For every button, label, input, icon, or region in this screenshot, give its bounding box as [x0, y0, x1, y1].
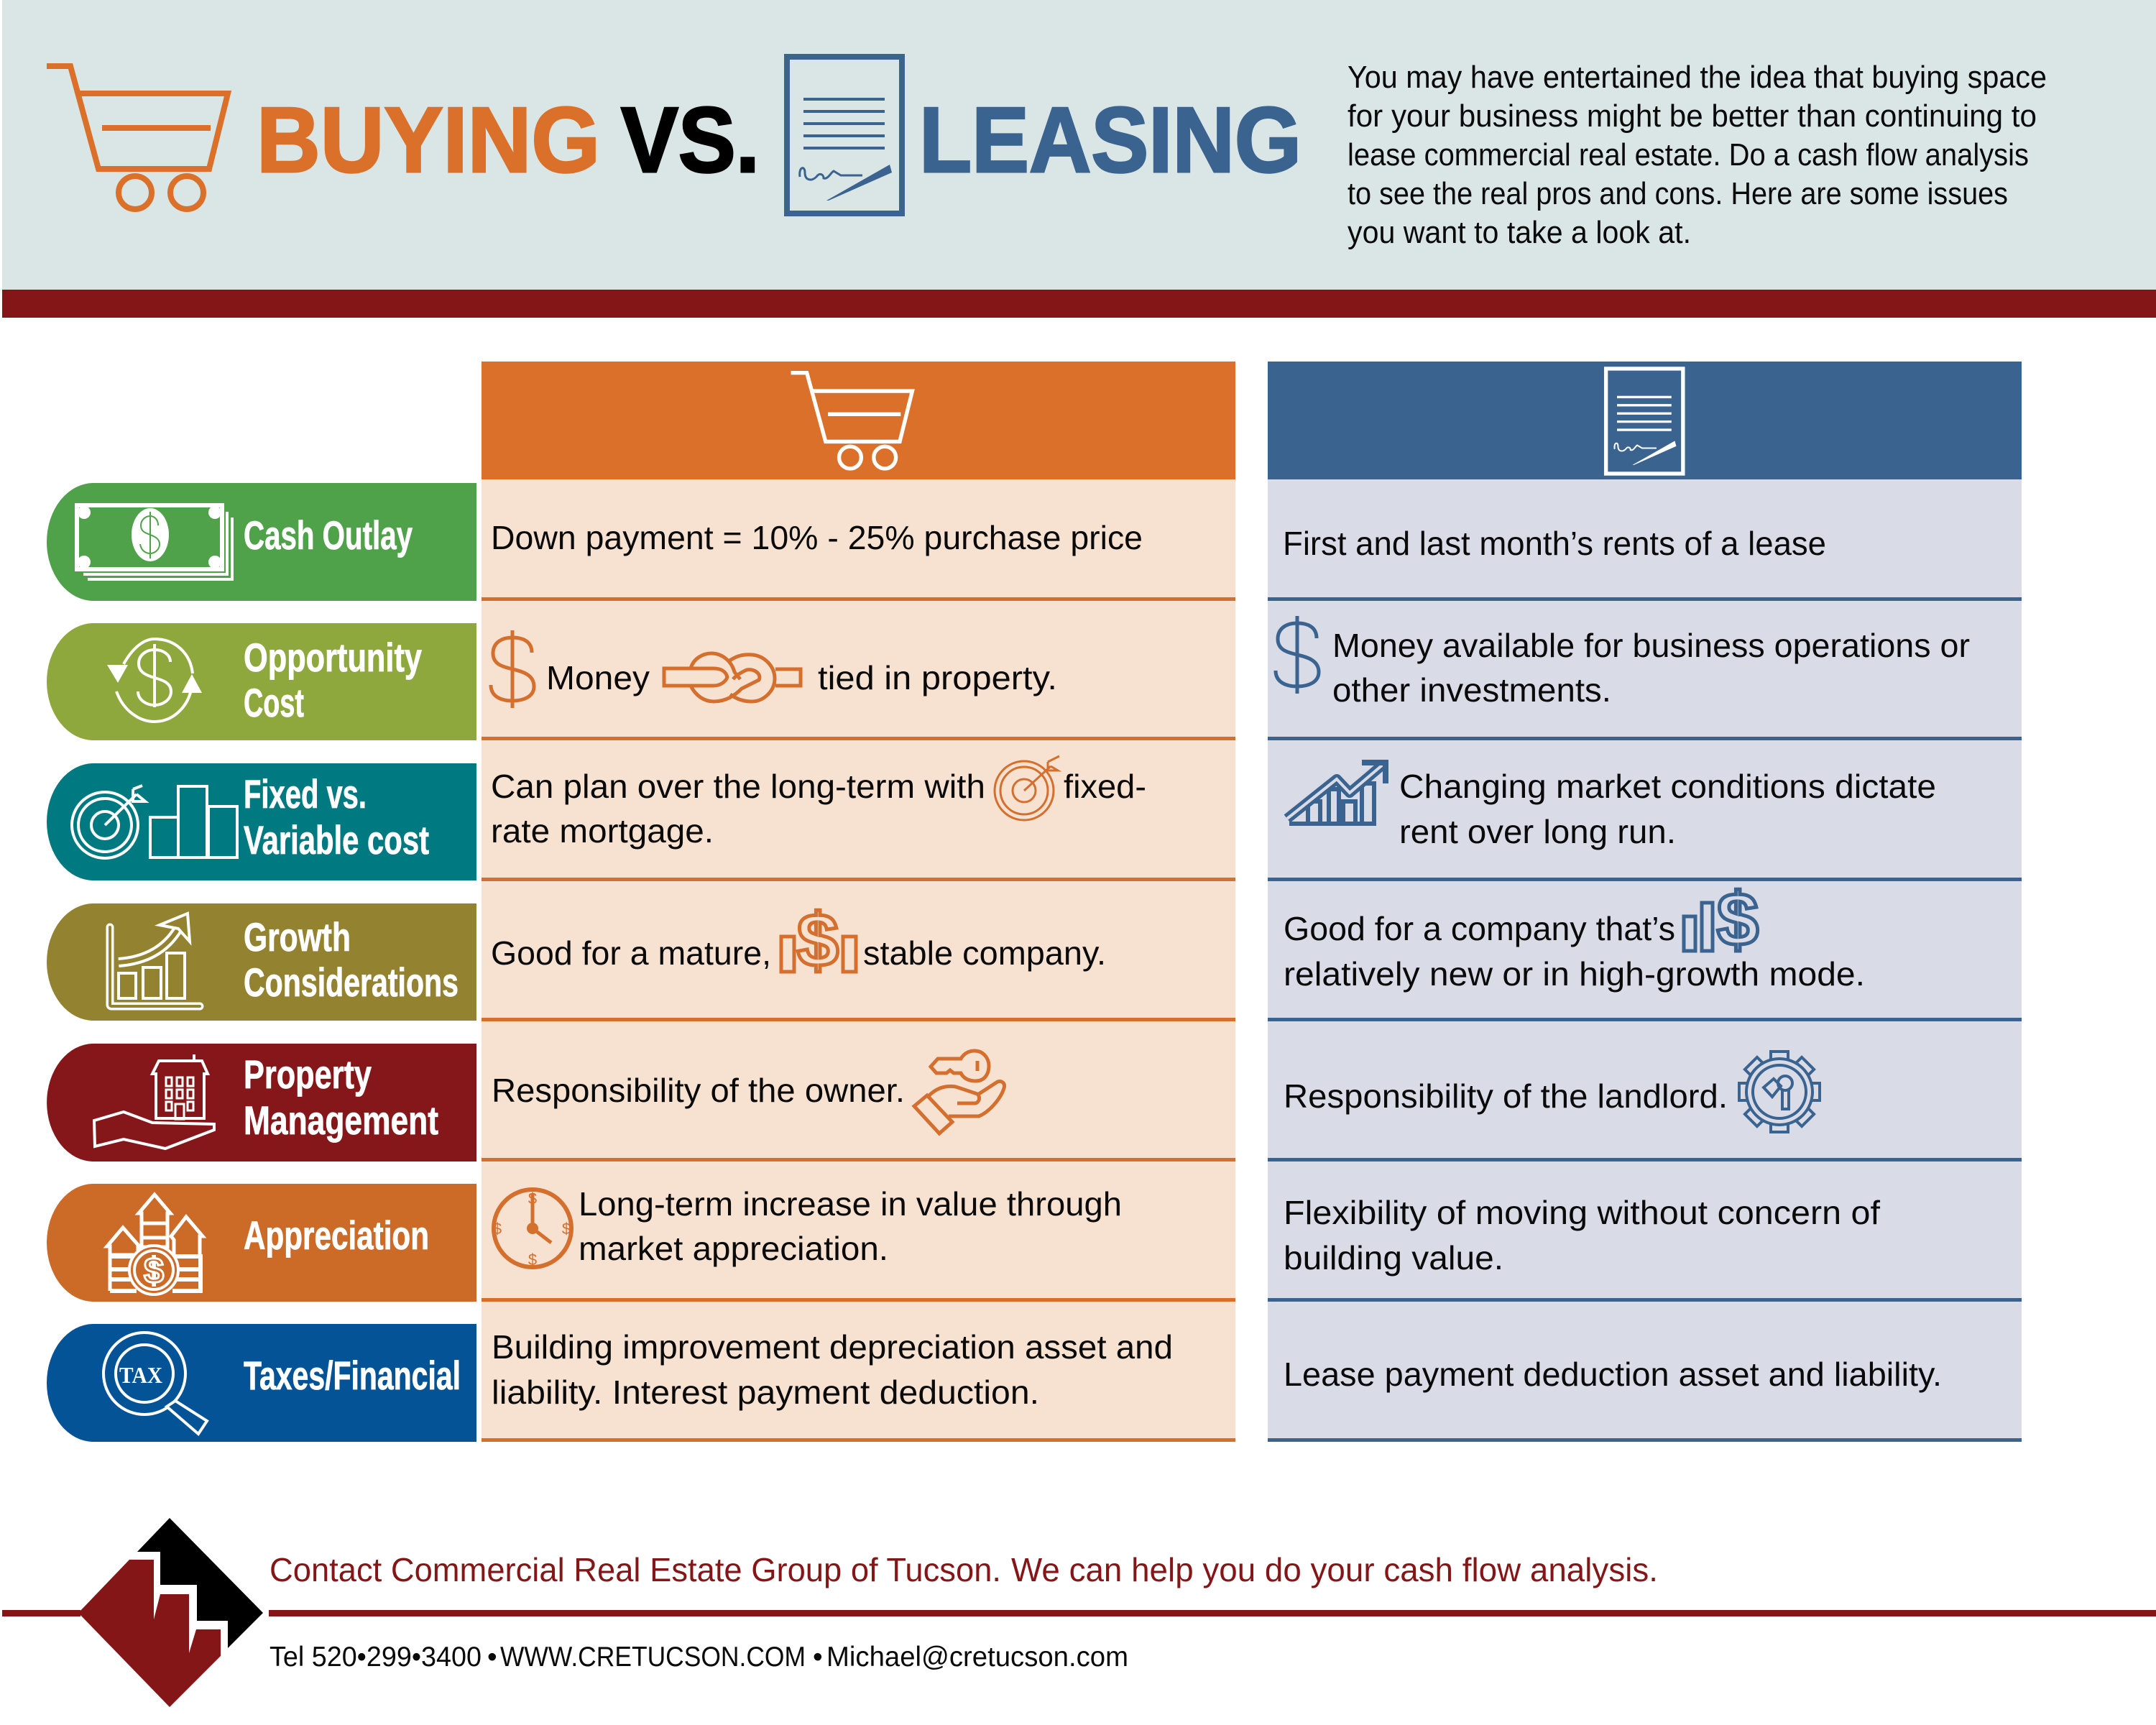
title: leasing: LEASING	[919, 88, 1302, 192]
label: taxes financial: TAX	[119, 1362, 162, 1388]
icon: clock: $	[528, 1251, 537, 1269]
text: tied in property: tied in property.	[818, 659, 1057, 696]
intro text block: you want to take a look at.	[1348, 215, 1691, 250]
intro text block: lease commercial real estate. Do a cash flow analysis	[1348, 137, 2029, 172]
icon: clock: $	[493, 1220, 502, 1238]
row dividers: buying	[482, 597, 1235, 1442]
text: flexibility: Flexibility of moving without concern of	[1284, 1194, 1880, 1231]
icon: clock	[493, 1190, 571, 1269]
label: opportunity cost	[47, 623, 476, 740]
footer call to action	[270, 1551, 1658, 1588]
leasing column header	[1268, 362, 2022, 479]
header band	[2, 0, 2156, 318]
footer contact details: Michael@cretucson.com	[826, 1642, 1128, 1673]
icon: growth dollar: $	[1717, 878, 1759, 962]
icon: shopping cart	[47, 66, 228, 209]
footer contact details: •	[487, 1642, 497, 1673]
text: long-term increase	[579, 1185, 1122, 1267]
text: money available	[1332, 627, 1970, 709]
text: flexibility	[1284, 1194, 1880, 1276]
text: down payment: Down payment = 10% - 25% purchase price	[491, 519, 1143, 556]
footer contact details: WWW.CRETUCSON.COM	[500, 1642, 806, 1673]
title: buying: BUYING	[257, 88, 600, 192]
intro text block: for your business might be better than continuing to	[1348, 98, 2037, 134]
icon: clock: $	[562, 1220, 571, 1238]
icon: rope knot	[664, 653, 801, 702]
text: changing market: rent over long run.	[1399, 813, 1676, 850]
title: vs: VS.	[621, 88, 760, 192]
intro text block: You may have entertained the idea that buying space	[1348, 60, 2047, 95]
label: opportunity cost: Cost	[244, 680, 304, 725]
text: changing market	[1399, 768, 1936, 850]
buying column header	[482, 362, 1235, 479]
intro text block: to see the real pros and cons. Here are some issues	[1348, 176, 2008, 211]
text: first and last month: First and last month’s rents of a lease	[1283, 525, 1826, 562]
label: growth considerations: Considerations	[244, 960, 459, 1005]
label: fixed vs variable cost	[47, 763, 476, 880]
label: property management	[47, 1044, 476, 1162]
text: money available: other investments.	[1332, 671, 1611, 709]
footer call to action: Contact Commercial Real Estate Group of Tucson.	[270, 1551, 1001, 1588]
text: long-term increase: market appreciation.	[579, 1230, 888, 1267]
icon: signed lease document	[787, 57, 902, 213]
text: lease payment deduction: Lease payment deduction asset and liability.	[1284, 1356, 1942, 1393]
icon: dollar	[1276, 616, 1319, 694]
text: good for a company: Good for a company that’s	[1284, 910, 1675, 947]
footer contact details	[270, 1642, 1128, 1673]
icon: gear with key	[1739, 1052, 1820, 1132]
panel: category labels	[47, 483, 476, 1442]
icon: target	[995, 756, 1059, 820]
text: responsibility owner: Responsibility of the owner.	[492, 1072, 905, 1109]
text: money: Money	[546, 659, 650, 696]
text: stable company: stable company.	[863, 934, 1106, 972]
text: can plan: Can plan over the long-term with	[491, 768, 985, 805]
text: good for a mature: Good for a mature,	[491, 934, 771, 972]
label: property management: Property	[244, 1052, 372, 1097]
text: flexibility: building value.	[1284, 1239, 1503, 1276]
logo: diamond	[78, 1518, 263, 1707]
label: appreciation	[47, 1184, 476, 1302]
label: growth considerations	[47, 903, 476, 1021]
row dividers: leasing	[1268, 597, 2022, 1442]
label: taxes financial	[47, 1324, 476, 1442]
text: building improvement: Building improvement depreciation asset and	[492, 1328, 1173, 1366]
text: can plan: fixed-	[1064, 768, 1146, 805]
label: opportunity cost: Opportunity	[244, 635, 422, 680]
text: changing market: Changing market conditions dictate	[1399, 768, 1936, 805]
intro text block	[1348, 60, 2047, 250]
icon: clock: $	[528, 1190, 537, 1208]
text: building improvement	[492, 1328, 1173, 1411]
icon: stable dollar	[781, 898, 856, 983]
panel: leasing column	[1268, 362, 2022, 1442]
text: can plan	[491, 768, 1146, 850]
label: fixed vs variable cost: Variable cost	[244, 817, 429, 862]
icon: stable dollar: $	[797, 898, 839, 983]
text: money available: Money available for business operations or	[1332, 627, 1970, 664]
footer rule	[2, 1610, 2156, 1616]
footer call to action: We can help you do your cash flow analysis.	[1011, 1551, 1658, 1588]
icon: market chart	[1287, 763, 1386, 824]
footer contact details: •	[813, 1642, 823, 1673]
text: building improvement: liability. Interest payment deduction.	[492, 1374, 1039, 1411]
text: relatively new: relatively new or in high-growth mode.	[1284, 955, 1865, 993]
icon: growth dollar	[1684, 878, 1759, 962]
text: can plan: rate mortgage.	[491, 812, 714, 850]
footer contact details: Tel 520•299•3400	[270, 1642, 482, 1673]
label: property management: Management	[244, 1098, 438, 1143]
label: fixed vs variable cost: Fixed vs.	[244, 771, 367, 816]
icon: dollar	[491, 630, 534, 708]
label: appreciation: $	[144, 1251, 164, 1291]
label: appreciation: Appreciation	[244, 1213, 429, 1258]
panel: buying column	[482, 362, 1235, 1442]
icon: hand with key	[914, 1051, 1005, 1133]
text: responsibility landlord: Responsibility of the landlord.	[1284, 1077, 1728, 1115]
label: cash outlay: Cash Outlay	[244, 512, 413, 558]
text: long-term increase: Long-term increase in value through	[579, 1185, 1122, 1223]
label: cash outlay	[47, 483, 476, 601]
label: taxes financial: Taxes/Financial	[244, 1353, 461, 1398]
label: growth considerations: Growth	[244, 914, 351, 960]
